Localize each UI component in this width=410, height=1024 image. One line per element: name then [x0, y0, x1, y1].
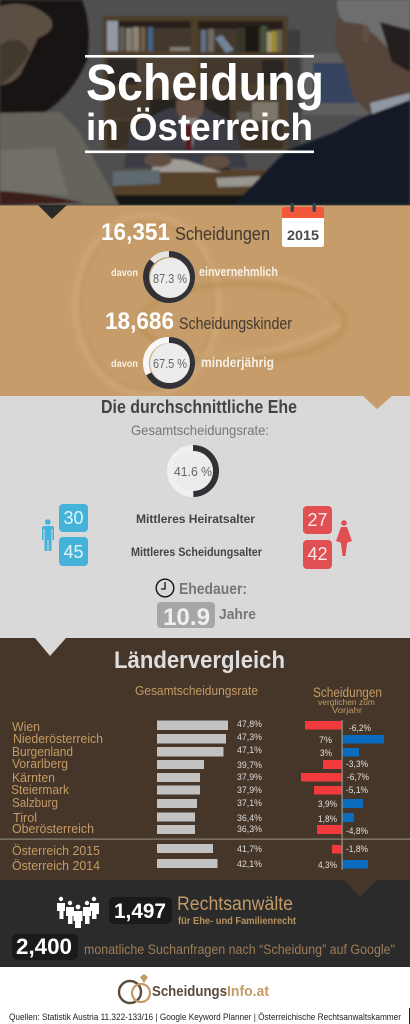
rate values: 47,1%	[237, 745, 262, 755]
logo: ScheidungsInfo.at: Scheidungs	[152, 984, 227, 1000]
man ages: 30	[63, 508, 84, 528]
rate values: 47,3%	[237, 732, 262, 742]
bar chart: Gesamtscheidungsrate	[157, 720, 228, 868]
stat: 10.9 jahre: Jahre	[219, 606, 256, 623]
icon: group of people	[57, 897, 99, 928]
country labels: Wien	[12, 719, 40, 734]
donut: 87.3 % einvernehmlich: davon	[111, 268, 138, 279]
woman ages: 42	[307, 544, 328, 564]
panel: Scheidungen 2015	[0, 203, 410, 396]
stat: 10.9 jahre	[157, 602, 256, 631]
stat: 16,351 Scheidungen	[101, 219, 270, 246]
stat: 2,400: 2,400	[16, 934, 72, 959]
donut: 67.5 % minderjährig: davon	[111, 359, 138, 370]
footer	[0, 967, 410, 1024]
column heading: Scheidungen verglichen zum Vorjahr: Scheidungen	[313, 685, 382, 700]
column heading: Scheidungen verglichen zum Vorjahr: verglichen zum	[318, 697, 375, 707]
rate values: 39,7%	[237, 760, 262, 770]
rate values: 36,4%	[237, 813, 262, 823]
country labels	[11, 719, 103, 873]
donut: 67.5 % minderjährig: minderjährig	[201, 354, 274, 370]
stat: 16,351 Scheidungen: 16,351	[101, 219, 170, 246]
donut: 87.3 % einvernehmlich: einvernehmlich	[199, 264, 278, 279]
change values: 1,8%	[318, 814, 337, 824]
label: Ehedauer: Ehedauer:	[179, 581, 247, 598]
change values: 4,3%	[318, 860, 337, 870]
label: Rechtsanwälte: für Ehe- und Familienrecht	[178, 916, 297, 927]
icon: clock	[156, 579, 174, 597]
icon: man	[42, 519, 54, 551]
stat: 18,686 Scheidungskinder: Scheidungskinder	[179, 315, 292, 333]
donut: 67.5 % minderjährig: 67.5 %	[153, 357, 187, 371]
stat: 16,351 Scheidungen: Scheidungen	[175, 223, 270, 244]
donut: 41.6 %	[170, 448, 216, 494]
label: Rechtsanwälte: Rechtsanwälte	[177, 894, 293, 915]
woman ages: 27	[307, 510, 328, 530]
change values: 3,9%	[318, 799, 337, 809]
panel: Die durchschnittliche Ehe	[0, 396, 410, 638]
country labels: Salzburg	[12, 795, 58, 810]
donut: 87.3 % einvernehmlich	[111, 254, 278, 300]
donut: 41.6 %: 41.6 %	[174, 464, 212, 479]
logo: ScheidungsInfo.at: Info.at	[227, 984, 269, 1000]
rate values: 36,3%	[237, 824, 262, 834]
rate values: 42,1%	[237, 859, 262, 869]
logo: ScheidungsInfo.at	[119, 974, 269, 1003]
woman from behind	[0, 112, 119, 205]
wedding rings photo	[75, 215, 345, 395]
column heading: Gesamtscheidungsrate: Gesamtscheidungsrate	[135, 683, 258, 698]
icon: woman	[336, 520, 352, 556]
donut: 67.5 % minderjährig	[111, 340, 274, 386]
country labels: Burgenland	[12, 744, 73, 759]
change values	[318, 723, 371, 870]
stat: 10.9 jahre: 10.9	[163, 604, 210, 631]
change values: -6,7%	[347, 772, 369, 782]
change values: 3%	[320, 748, 332, 758]
stat: 18,686 Scheidungskinder: 18,686	[105, 308, 174, 335]
diverging bar chart: Scheidungen vs. Vorjahr	[301, 720, 384, 870]
triangle pointer	[35, 638, 66, 656]
panel: Rechtsanwälte und Suchanfragen	[0, 880, 410, 967]
man ages	[59, 504, 88, 566]
country labels: Oberösterreich	[12, 821, 94, 836]
triangle pointer	[363, 396, 392, 409]
change values: -6,2%	[349, 723, 371, 733]
heading: Die durchschnittliche Ehe	[101, 397, 297, 417]
change values: -5,1%	[346, 785, 368, 795]
calendar icon 2015	[282, 203, 324, 247]
rate values: 37,1%	[237, 798, 262, 808]
country labels: Vorarlberg	[12, 756, 68, 771]
column heading: Scheidungen verglichen zum Vorjahr: Vorjahr	[332, 705, 362, 715]
change values: -4,8%	[346, 826, 368, 836]
title block: Scheidung	[86, 54, 324, 111]
change values: 7%	[319, 735, 332, 745]
country labels: Niederösterreich	[13, 731, 103, 746]
country labels: Österreich 2014	[12, 858, 100, 873]
hero photo: couple at lawyer's desk	[0, 0, 410, 205]
rate values: 37,9%	[237, 785, 262, 795]
change values: -3,3%	[346, 759, 368, 769]
triangle pointer	[344, 880, 377, 897]
country labels: Steiermark	[11, 782, 69, 797]
column heading: Scheidungen verglichen zum Vorjahr	[313, 685, 382, 715]
woman ages	[303, 506, 332, 569]
title block: in Österreich	[86, 106, 313, 149]
heading: Ländervergleich	[114, 647, 285, 674]
panel: Ländervergleich	[0, 638, 410, 880]
stat: 18,686 Scheidungskinder	[105, 308, 292, 335]
label: Rechtsanwälte	[177, 894, 297, 927]
rate values: 37,9%	[237, 772, 262, 782]
country labels: Österreich 2015	[12, 843, 100, 858]
man from behind	[233, 99, 410, 205]
triangle pointer	[38, 205, 67, 219]
rate values: 41,7%	[237, 844, 262, 854]
country labels: Tirol	[13, 810, 37, 825]
country labels: Kärnten	[12, 770, 55, 785]
rate values: 47,8%	[237, 719, 262, 729]
change values: -1,8%	[346, 844, 368, 854]
label: Mittleres Scheidungsalter: Mittleres Scheidungsalter	[131, 547, 262, 559]
label: Mittleres Heiratsalter: Mittleres Heiratsalter	[136, 514, 256, 526]
man ages: 45	[63, 542, 84, 562]
subheading: Gesamtscheidungsrate:	[131, 422, 269, 438]
donut: 87.3 % einvernehmlich: 87.3 %	[153, 272, 187, 286]
calendar icon 2015: 2015	[287, 227, 319, 243]
rate values	[237, 719, 262, 869]
title block	[85, 54, 324, 153]
stat: 1,497: 1,497	[114, 900, 166, 923]
